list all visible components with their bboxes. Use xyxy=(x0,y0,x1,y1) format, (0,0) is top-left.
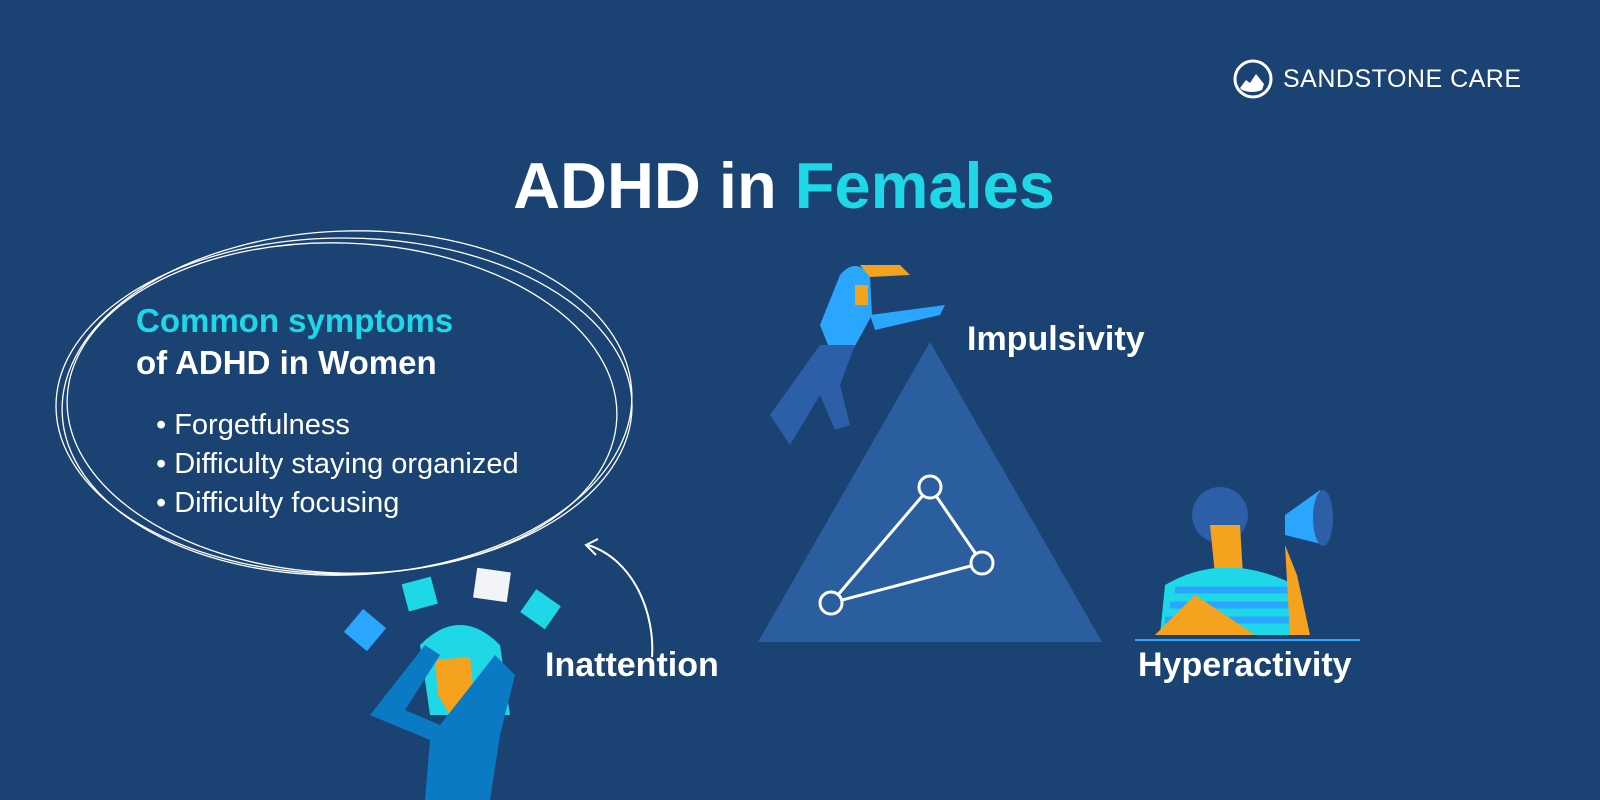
label: Impulsivity: Impulsivity xyxy=(967,320,1145,358)
symptom list: • Difficulty focusing xyxy=(156,487,399,519)
heading: Common symptoms xyxy=(136,302,453,339)
symptom list: • Difficulty staying organized xyxy=(156,448,519,480)
arrow xyxy=(584,538,654,658)
symptom list: • Forgetfulness xyxy=(156,409,350,441)
title: ADHD in Females xyxy=(513,149,1055,222)
label: Inattention: Inattention xyxy=(545,646,719,684)
illustration: woman with puzzle pieces xyxy=(344,568,561,800)
logo xyxy=(1234,60,1522,98)
icon: mountain logo xyxy=(1234,60,1272,98)
triangle diagram xyxy=(758,342,1102,642)
symptom list xyxy=(156,409,519,519)
illustration: man with megaphone xyxy=(1135,487,1360,641)
ellipse panel: symptoms xyxy=(55,230,633,576)
illustration: jumping woman xyxy=(770,265,945,445)
heading: of ADHD in Women xyxy=(136,344,437,381)
label: Hyperactivity: Hyperactivity xyxy=(1138,646,1352,684)
logo text: SANDSTONE CARE xyxy=(1283,65,1522,93)
heading xyxy=(136,302,453,381)
